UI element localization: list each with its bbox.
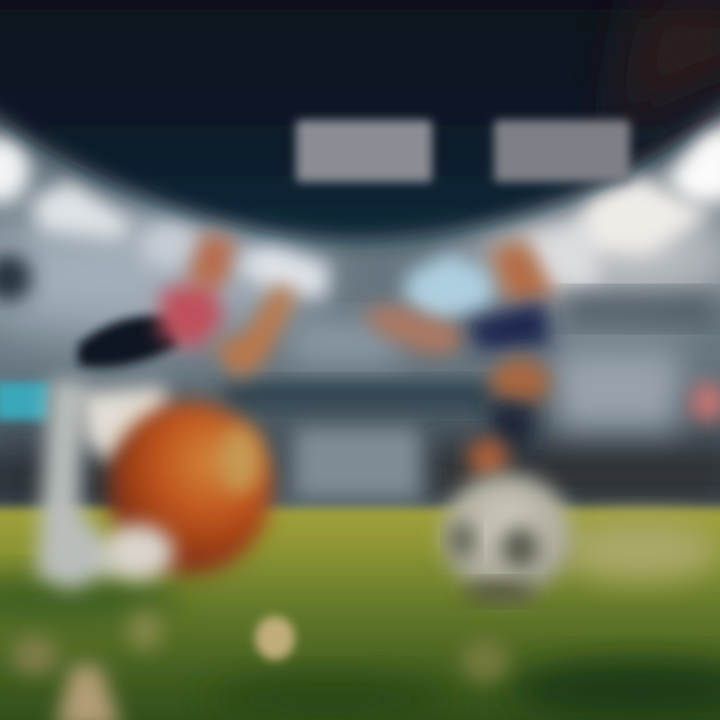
right player: [362, 240, 555, 478]
stand details: [0, 254, 720, 498]
right player ankle: [468, 438, 508, 478]
soccer ball: [441, 473, 573, 602]
scoreboard screen: left: [296, 120, 432, 182]
grass field: [0, 508, 720, 720]
stadium stands background: [0, 0, 720, 520]
left player: [36, 232, 296, 590]
left player shorts: [80, 385, 168, 465]
left player dark waist: [78, 316, 178, 367]
right player shirt: [465, 300, 550, 350]
left player head: [190, 232, 235, 290]
right player sock: [488, 400, 535, 450]
left player arm: [212, 282, 296, 380]
clouds and bright stand lights: [0, 120, 720, 340]
right player knee: [490, 358, 550, 406]
left player shirt: [158, 280, 225, 350]
right player arm: [362, 305, 470, 354]
scoreboard screen: right: [494, 120, 630, 182]
orange ball: [102, 402, 272, 580]
left player legs: [36, 380, 125, 590]
dark stadium roof: [0, 0, 720, 240]
right player head: [490, 240, 555, 305]
